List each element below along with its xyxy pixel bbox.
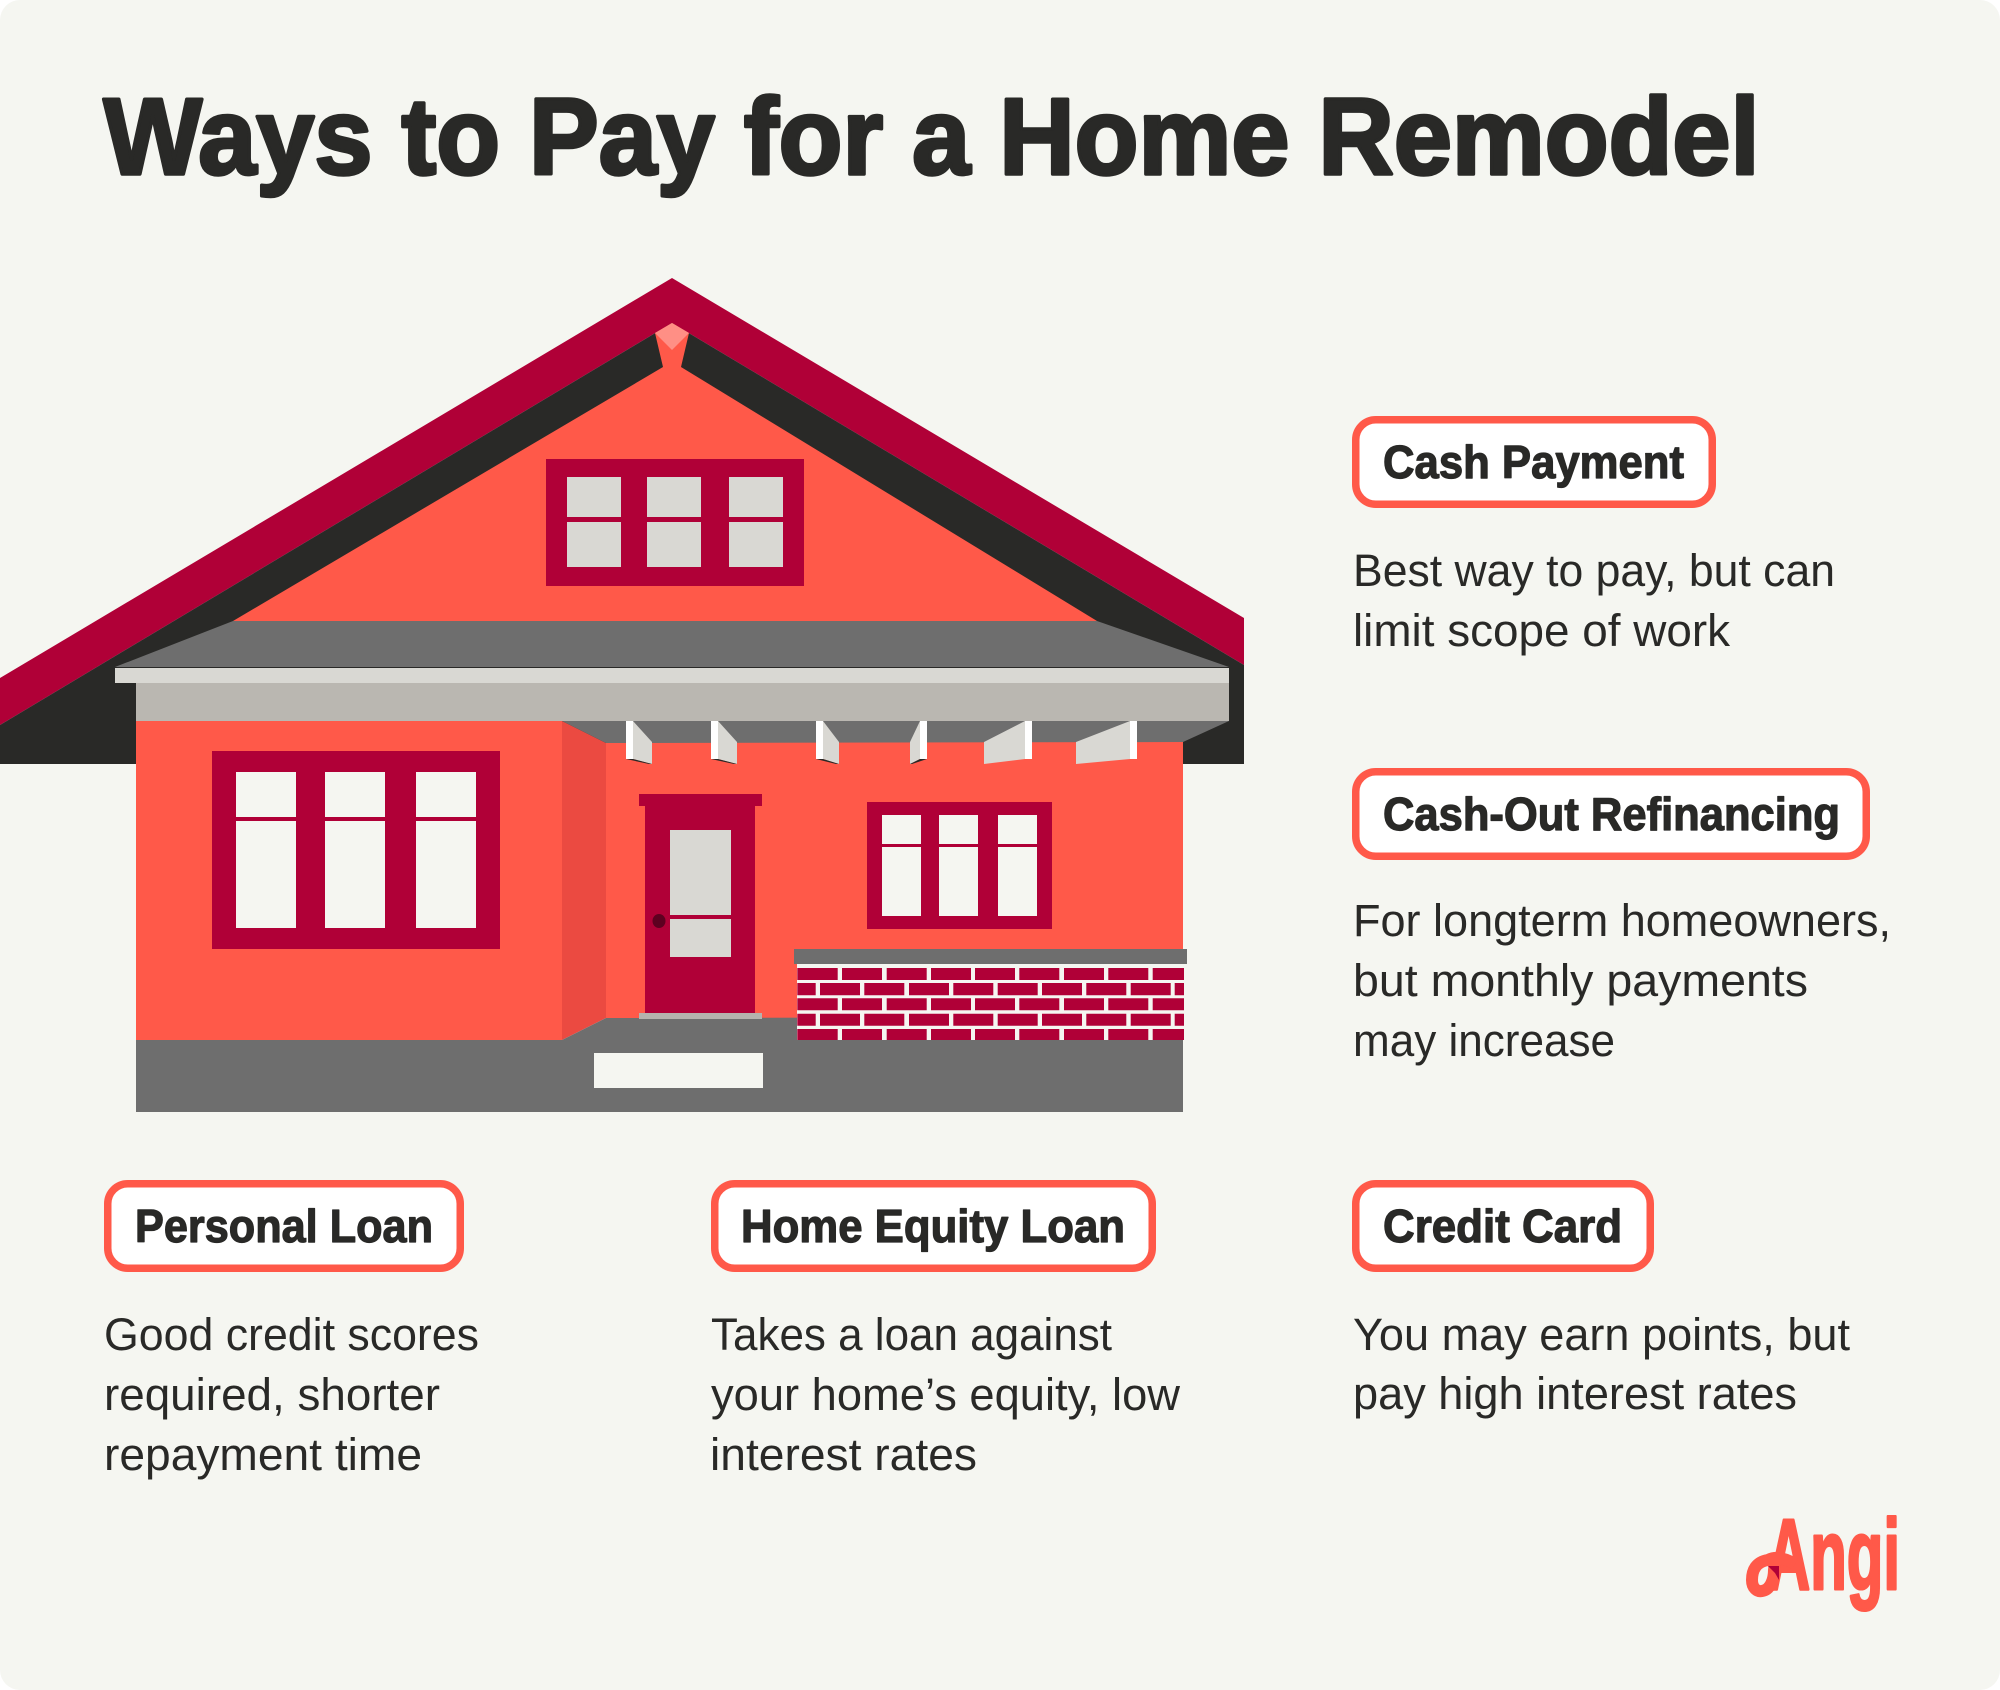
text: cash payment description xyxy=(1353,545,1835,656)
text: home equity loan description: interest rates xyxy=(710,1429,977,1480)
text: cash-out refinancing description xyxy=(1353,895,1891,1066)
label: credit card xyxy=(1356,1184,1650,1268)
label: cash payment: Cash Payment xyxy=(1383,436,1684,488)
porch roof slope xyxy=(115,621,1229,667)
porch back wall xyxy=(606,742,1183,1020)
wall recess shadow xyxy=(562,721,606,1040)
panel: credit card xyxy=(1353,1184,1850,1419)
front step xyxy=(594,1053,763,1088)
house illustration xyxy=(0,278,1244,1112)
logo: Angi xyxy=(1752,1499,1900,1611)
text: personal loan description: Good credit scores xyxy=(104,1309,479,1360)
right window xyxy=(867,802,1052,929)
roof: dark underside xyxy=(0,323,1244,764)
panel: personal loan xyxy=(104,1184,479,1480)
title: Ways to Pay for a Home Remodel xyxy=(104,76,1760,198)
panel: home equity loan xyxy=(710,1184,1181,1480)
upper window xyxy=(546,459,804,586)
text: credit card description: You may earn points, but xyxy=(1353,1309,1850,1360)
label: cash-out refinancing: Cash-Out Refinancing xyxy=(1383,788,1840,840)
text: credit card description: pay high interest rates xyxy=(1353,1368,1797,1419)
panel: cash payment xyxy=(1353,420,1835,656)
brick planter xyxy=(794,949,1187,1040)
gable wall xyxy=(233,323,1097,621)
gable peak highlight xyxy=(655,323,689,350)
front door xyxy=(639,794,762,1019)
label: cash payment xyxy=(1356,420,1712,504)
label: cash-out refinancing xyxy=(1356,772,1866,856)
panel: cash-out refinancing xyxy=(1353,772,1891,1066)
porch brackets xyxy=(626,721,1137,764)
label: home equity loan xyxy=(715,1184,1152,1268)
logo: Angi: Angi xyxy=(1767,1499,1900,1611)
roof fascia beige band xyxy=(136,683,1229,721)
label: credit card: Credit Card xyxy=(1383,1200,1622,1252)
text: home equity loan description xyxy=(710,1309,1181,1480)
foundation and porch floor xyxy=(136,1017,1183,1112)
label: personal loan: Personal Loan xyxy=(135,1200,433,1252)
text: home equity loan description: Takes a loan against xyxy=(711,1309,1112,1360)
text: home equity loan description: your home’s equity, low xyxy=(711,1369,1181,1420)
text: personal loan description xyxy=(104,1309,479,1480)
text: cash-out refinancing description: For longterm homeowners, xyxy=(1353,895,1891,946)
label: home equity loan: Home Equity Loan xyxy=(741,1200,1125,1252)
text: cash payment description: limit scope of work xyxy=(1353,605,1731,656)
text: cash payment description: Best way to pay, but can xyxy=(1353,545,1835,596)
text: cash-out refinancing description: but monthly payments xyxy=(1353,955,1808,1006)
porch soffit xyxy=(562,721,1229,743)
roof fascia light strip xyxy=(115,668,1229,683)
large left window xyxy=(212,751,500,949)
label: personal loan xyxy=(108,1184,460,1268)
roof: crimson trim xyxy=(0,278,1244,725)
text: credit card description xyxy=(1353,1309,1850,1419)
text: cash-out refinancing description: may increase xyxy=(1353,1015,1615,1066)
text: personal loan description: required, shorter xyxy=(104,1369,440,1420)
left wall xyxy=(136,721,562,1040)
text: personal loan description: repayment time xyxy=(104,1429,422,1480)
